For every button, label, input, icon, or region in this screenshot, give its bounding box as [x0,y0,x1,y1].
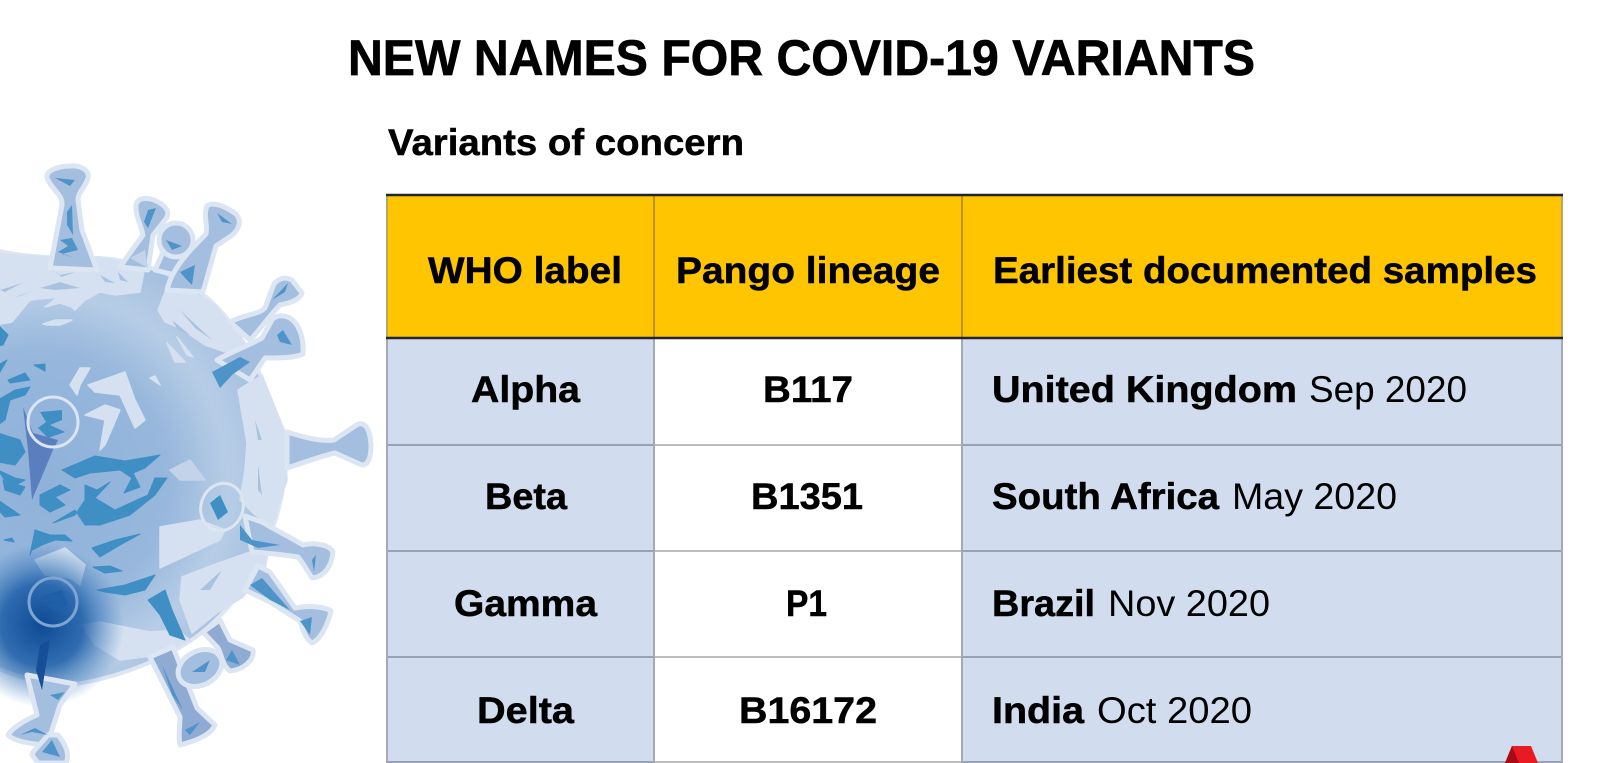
row: beta: Beta [485,476,567,517]
title: NEW NAMES FOR COVID-19 VARIANTS [348,30,1255,86]
virus pale band streaks [0,270,262,590]
table: variants of concern [386,195,1563,763]
table header labels: Pango lineage [676,250,940,291]
virus surface rings [28,397,250,626]
row: delta: Oct 2020 [1097,690,1252,731]
icon: red logo corner [1505,746,1538,763]
row: delta: Delta [477,690,574,731]
row: beta [485,476,1397,517]
row: gamma: Gamma [454,583,597,624]
row: gamma: P1 [786,583,827,624]
row: alpha: B117 [763,369,853,410]
heading: variants of concern: Variants of concern [388,122,744,163]
row: delta: India [992,690,1084,731]
row: alpha: Alpha [471,369,580,410]
virus shadow wedge [23,407,58,500]
row: gamma: Brazil [992,583,1095,624]
row: gamma: Nov 2020 [1108,583,1270,624]
row: beta: B1351 [751,476,863,517]
virus ring centres [38,410,228,612]
table header labels [428,250,1537,291]
row: gamma [454,583,1270,624]
table header labels: WHO label [428,250,622,291]
row: beta: May 2020 [1232,476,1397,517]
table header labels: Earliest documented samples [993,250,1537,291]
virus dark shadow [0,540,130,712]
row: alpha: United Kingdom [992,369,1297,410]
virus spikes [8,166,371,763]
virus spike markings [20,178,316,757]
table header background [387,195,1562,338]
virus dark blue markings [0,325,185,640]
table column fills [387,338,1562,763]
row: delta [477,690,1252,731]
row: delta: B16172 [739,690,877,731]
row: alpha: Sep 2020 [1309,369,1467,410]
virus body [0,250,285,684]
virus pale surface patches [0,254,287,660]
row: alpha [471,369,1467,410]
row: beta: South Africa [992,476,1219,517]
illustration: coronavirus particle [0,166,371,763]
